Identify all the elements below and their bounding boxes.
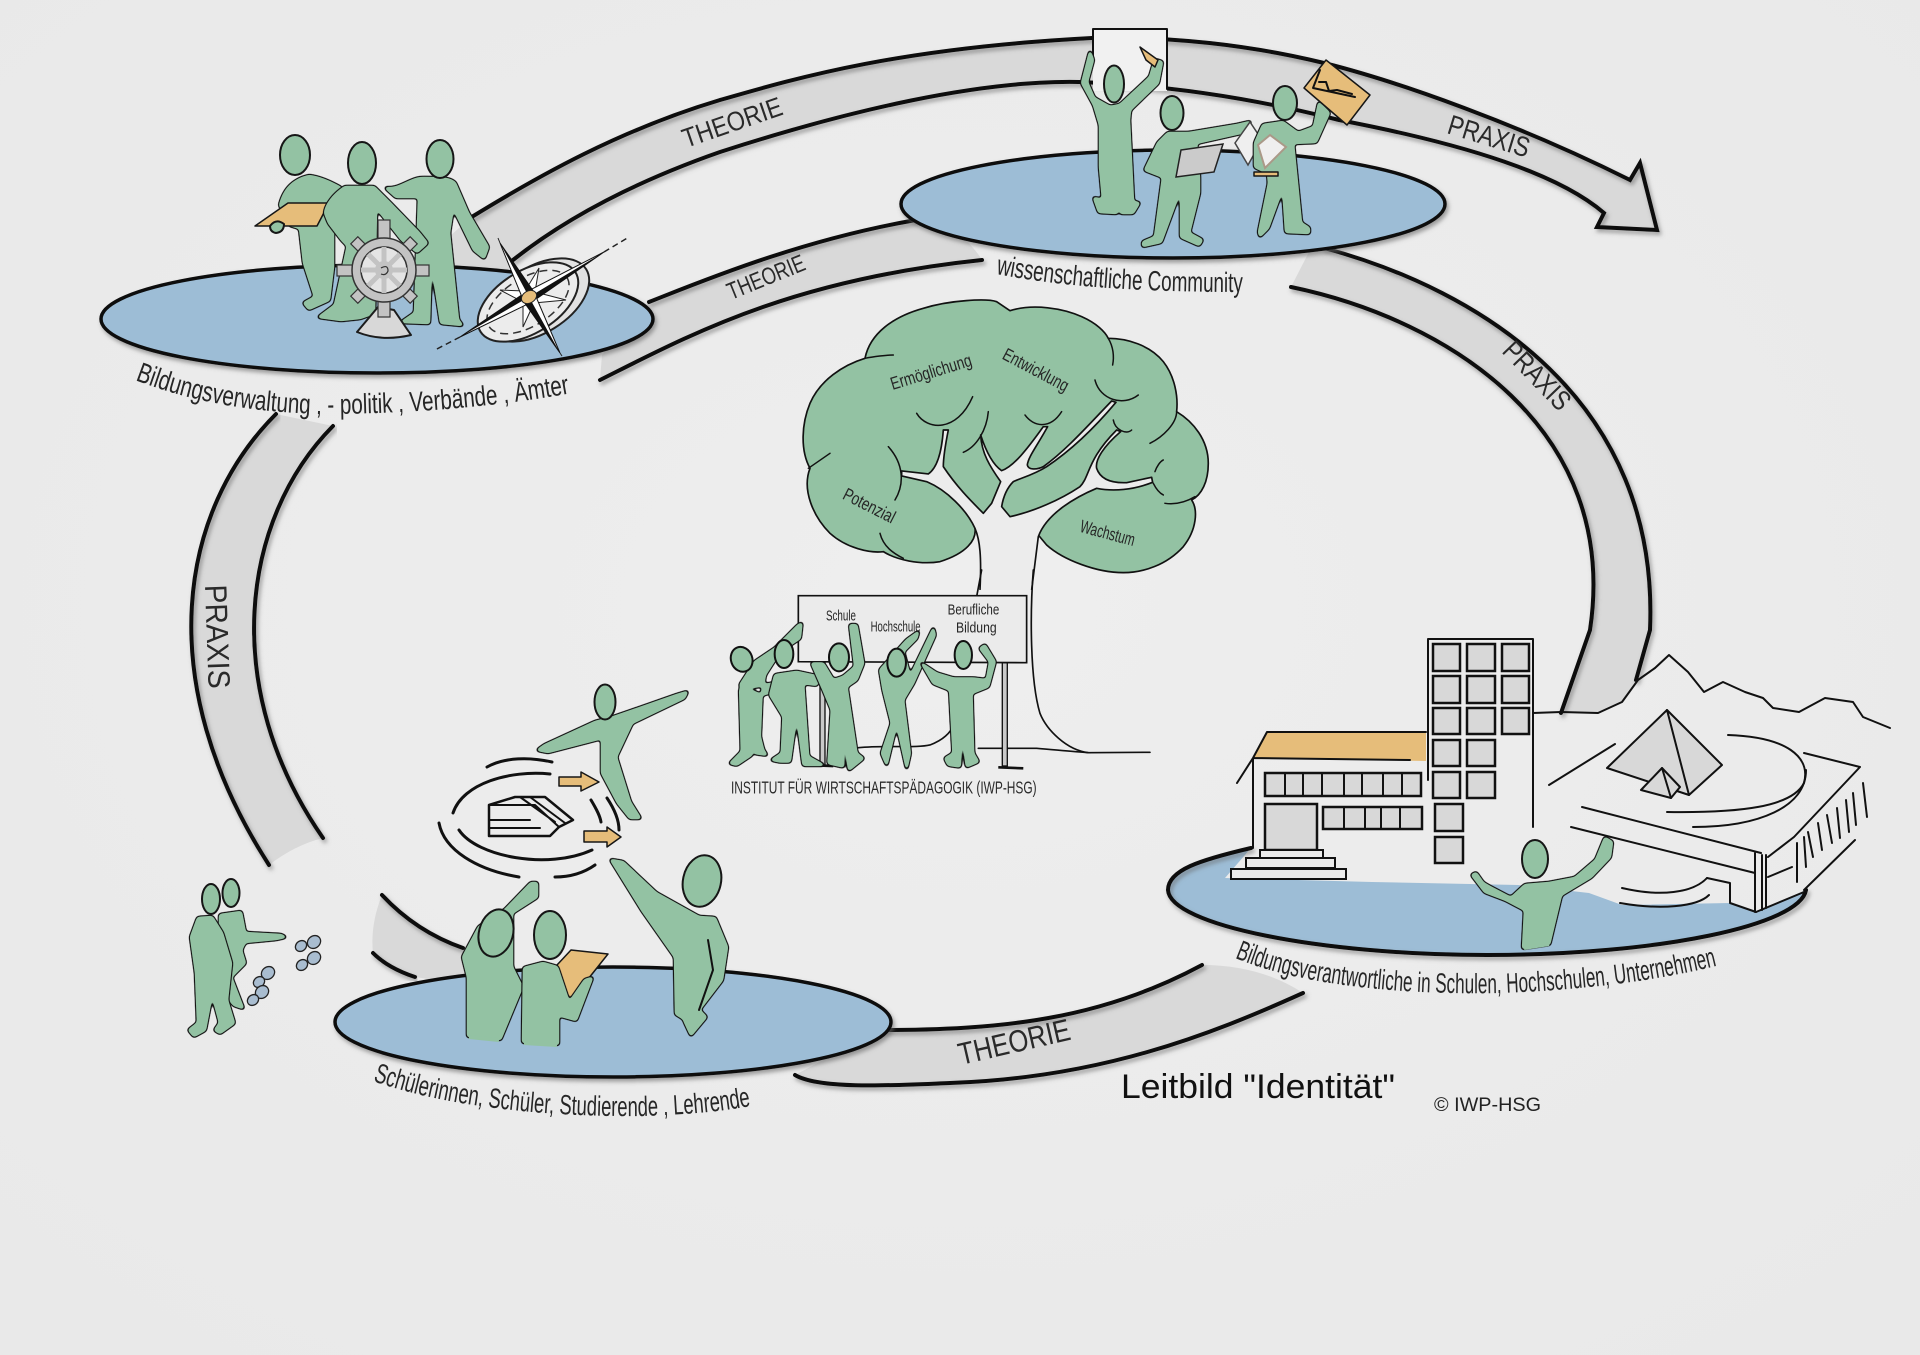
figure: person with raised arms [1472, 838, 1612, 949]
arrow: bottom band Theorie [795, 965, 1303, 1085]
figure: person 3 [812, 625, 863, 770]
label: platform caption: Bildungsverwaltung , - politik , Verbände , Ämter [136, 362, 568, 420]
panel: two walking figures with footprints [189, 879, 323, 1036]
text: Bildung: Bildung [956, 621, 997, 637]
text: Berufliche: Berufliche [948, 602, 999, 618]
figure: person with tablet [255, 135, 341, 309]
text: Hochschule: Hochschule [871, 620, 921, 636]
figure: student pointing up [463, 883, 537, 1040]
copyright note: © IWP-HSG [1434, 1095, 1541, 1116]
figure: person 1 [730, 623, 802, 765]
figure heads [727, 640, 972, 677]
arrow: inner band Theorie [600, 220, 982, 380]
building: low school block [1231, 732, 1426, 879]
figure: person 5 [922, 645, 995, 767]
figure: walker front [189, 884, 234, 1036]
arrow: small band entering lower platform [372, 895, 470, 985]
figure: person 2 [770, 672, 823, 765]
icon: footprints [245, 933, 323, 1008]
building: university with pyramid [1549, 710, 1867, 912]
icon: white paper sheet [1093, 29, 1167, 91]
figure: student with tablet [523, 911, 608, 1045]
platform ellipse [101, 265, 653, 373]
panel: institute group at signboard [727, 570, 1150, 797]
arrow: upper orange [559, 772, 599, 791]
panel: education administration platform [98, 134, 659, 420]
icon: chart card [1304, 60, 1370, 125]
arrow: right band Praxis [1291, 248, 1650, 713]
arrow: left band Praxis [191, 414, 333, 865]
rings around book [439, 759, 619, 877]
panel: learners platform [332, 854, 898, 1119]
label: Praxis: PRAXIS [198, 584, 237, 689]
text: institute caption: INSTITUT FÜR WIRTSCHAFTSPÄDAGOGIK (IWP-HSG) [731, 777, 1037, 797]
panel: school and university buildings platform [1166, 638, 1891, 996]
arrow: lower orange [584, 827, 621, 847]
icon: compass [435, 237, 629, 359]
label: Praxis: PRAXIS [1497, 335, 1577, 417]
tree trunk and ground [858, 570, 1150, 753]
figure: person 4 [880, 628, 935, 768]
figure: person with laptop [1143, 96, 1250, 246]
title: Leitbild "Identität" [1121, 1068, 1395, 1106]
label: platform caption: Schülerinnen, Schüler, Studierende , Lehrende [374, 1064, 750, 1119]
text: Ermöglichung: Ermöglichung [888, 350, 974, 394]
panel: tree with values [803, 300, 1208, 590]
figure: person at wheel [319, 142, 427, 320]
icon: book [489, 797, 573, 836]
platform water [1168, 848, 1806, 955]
text: Potenzial: Potenzial [840, 484, 899, 527]
label: Theorie: THEORIE [678, 91, 786, 154]
mountain line [1533, 655, 1890, 728]
icon: ship wheel on stand [337, 220, 429, 338]
text: Wachstum: Wachstum [1078, 516, 1137, 550]
figure: person pointing right [386, 140, 488, 325]
figure: person with outstretched arms [538, 684, 687, 818]
label: platform caption: wissenschaftliche Community [998, 256, 1243, 298]
panel: floating book and leader figure [439, 684, 687, 877]
figure: person with chart [1235, 60, 1370, 236]
building: tower [1428, 639, 1533, 863]
arrow: top band Theorie to Praxis [449, 38, 1657, 290]
figure: teacher reaching up [611, 852, 727, 1035]
label: Theorie: THEORIE [723, 250, 809, 306]
panel: scientific community platform [886, 28, 1452, 328]
text: Schule: Schule [826, 609, 856, 625]
figure: person drawing on paper [1082, 47, 1162, 213]
tree crown [803, 300, 1208, 590]
signboard [798, 596, 1027, 768]
label: Praxis: PRAXIS [1444, 109, 1534, 163]
platform ellipse [335, 967, 891, 1077]
label: Theorie: THEORIE [955, 1012, 1074, 1072]
label: platform caption: Bildungsverantwortliche in Schulen, Hochschulen, Unternehmen [1236, 940, 1716, 996]
figure: walker rear [220, 879, 285, 1008]
text: Entwicklung: Entwicklung [999, 344, 1072, 396]
platform ellipse [901, 150, 1445, 258]
